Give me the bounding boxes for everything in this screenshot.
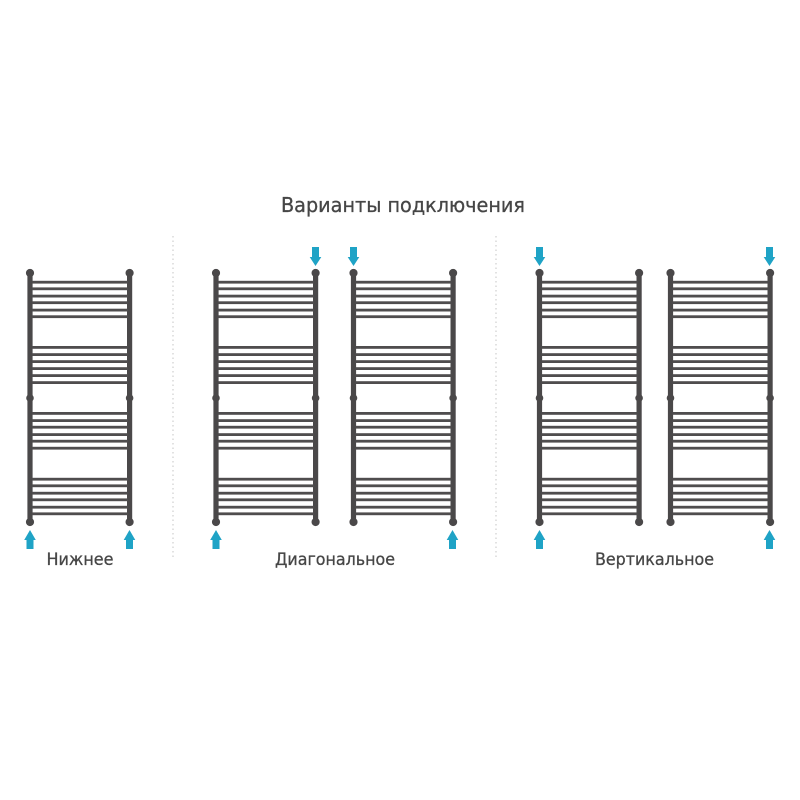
label: vertical: Вертикальное (595, 550, 714, 570)
divider: bottom / diagonal (172, 236, 174, 559)
towel rail 4 (535, 269, 643, 526)
arrow: bottom left inlet (534, 530, 545, 549)
label: bottom: Нижнее (46, 550, 114, 570)
arrow: bottom left inlet (210, 530, 222, 549)
towel rail 1 (26, 269, 134, 526)
arrow: bottom right inlet (764, 530, 775, 549)
towel rail 2 (212, 269, 320, 526)
arrow: bottom right inlet (447, 530, 458, 549)
arrow: top left inlet (348, 247, 359, 266)
arrow: top right inlet (764, 247, 775, 266)
arrow: right inlet (124, 530, 135, 549)
arrow: top right inlet (310, 247, 321, 266)
title: Варианты подключения (281, 193, 525, 217)
arrow: top left inlet (534, 247, 545, 266)
arrow: left inlet (24, 530, 36, 549)
label: diagonal: Диагональное (275, 550, 395, 570)
towel rail 3 (349, 269, 457, 526)
divider: diagonal / vertical (495, 236, 497, 559)
towel rail 5 (666, 269, 774, 526)
panel: bottom connection (24, 269, 135, 570)
panel: vertical connection (534, 247, 775, 570)
panel: diagonal connection (210, 247, 458, 570)
